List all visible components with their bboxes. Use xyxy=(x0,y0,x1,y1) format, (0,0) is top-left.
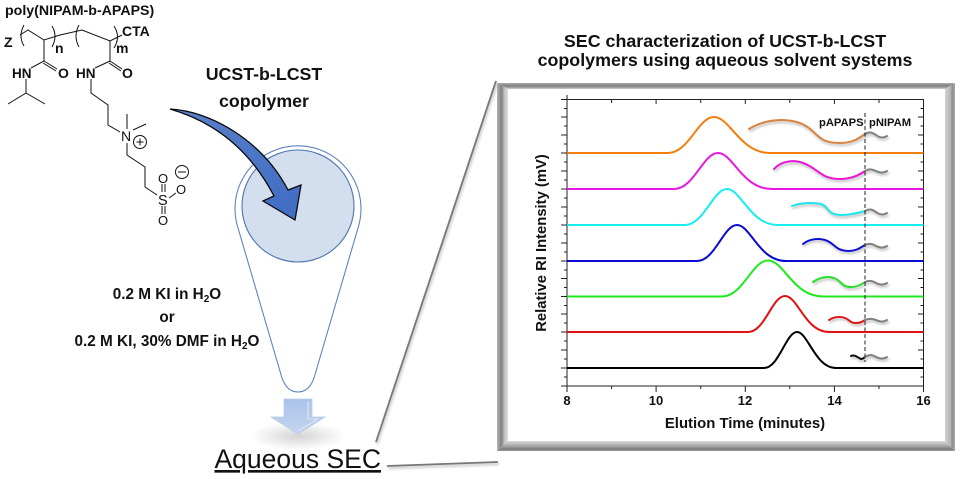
trace: green xyxy=(567,260,924,296)
y axis title: Relative RI Intensity (mV) xyxy=(534,154,550,332)
trace: black xyxy=(567,332,924,368)
text: solvent systems: O xyxy=(248,333,260,350)
chemical structure: poly(NIPAM-b-APAPS): HN xyxy=(12,66,32,81)
chemical structure: poly(NIPAM-b-APAPS): N xyxy=(121,128,131,144)
text: solvent systems: 0.2 M KI, 30% DMF in H xyxy=(75,333,242,350)
heading: chart title: SEC characterization of UCST-b-LCST xyxy=(564,31,886,51)
icon: down arrow to SEC xyxy=(250,399,346,450)
text: solvent systems: O xyxy=(209,286,221,303)
text: solvent systems: or xyxy=(159,309,175,326)
chemical structure: poly(NIPAM-b-APAPS) xyxy=(4,3,188,228)
polymer bonds xyxy=(8,25,188,214)
panel: bevelled chart frame xyxy=(497,83,955,451)
zoom lines from SEC to chart panel xyxy=(376,81,498,466)
funnel: sample drop shape xyxy=(235,146,361,392)
x tick labels: 16 xyxy=(916,393,931,408)
label: UCST-b-LCST copolymer xyxy=(206,64,322,111)
chemical structure: poly(NIPAM-b-APAPS): Z xyxy=(4,34,13,50)
block labels xyxy=(819,117,911,129)
x tick labels: 8 xyxy=(563,393,571,408)
heading: chart title xyxy=(538,31,912,70)
trace: cyan xyxy=(567,189,924,225)
trace: magenta xyxy=(567,153,924,189)
label: UCST-b-LCST copolymer: copolymer xyxy=(219,91,309,111)
chemical structure: poly(NIPAM-b-APAPS): m xyxy=(116,40,128,56)
chart axes and ticks xyxy=(561,95,924,392)
chemical structure: poly(NIPAM-b-APAPS): O xyxy=(58,65,69,81)
text: solvent systems: 2 xyxy=(204,294,210,305)
heading: Aqueous SEC: Aqueous SEC xyxy=(214,444,381,474)
label: UCST-b-LCST copolymer: UCST-b-LCST xyxy=(206,64,322,84)
chart: SEC traces xyxy=(534,95,931,432)
text: solvent systems: 0.2 M KI in H xyxy=(113,286,204,303)
trace: orange xyxy=(567,117,924,153)
dashed divider xyxy=(864,113,866,362)
block labels: pAPAPS xyxy=(819,117,864,129)
chemical structure: poly(NIPAM-b-APAPS): S xyxy=(158,193,168,209)
text: solvent systems xyxy=(75,286,260,352)
block labels: pNIPAM xyxy=(869,117,911,129)
chemical structure: poly(NIPAM-b-APAPS): CTA xyxy=(122,23,150,39)
x tick labels: 14 xyxy=(827,393,842,408)
chemical structure: poly(NIPAM-b-APAPS): HN xyxy=(76,66,96,81)
chemical structure: poly(NIPAM-b-APAPS): O xyxy=(158,171,168,186)
x tick labels xyxy=(563,393,931,408)
heading: chart title: copolymers using aqueous solvent systems xyxy=(538,50,912,70)
chemical structure: poly(NIPAM-b-APAPS): n xyxy=(55,40,64,56)
block copolymer chain glyphs xyxy=(749,120,887,359)
x axis title: Elution Time (minutes) xyxy=(665,416,825,432)
chemical structure: poly(NIPAM-b-APAPS): O xyxy=(176,182,186,197)
trace: red xyxy=(567,296,924,332)
trace: blue xyxy=(567,225,924,261)
x tick labels: 10 xyxy=(649,393,663,408)
chemical structure: poly(NIPAM-b-APAPS): O xyxy=(158,213,168,228)
chemical structure: poly(NIPAM-b-APAPS): O xyxy=(122,65,133,81)
structure title: poly(NIPAM-b-APAPS) xyxy=(5,3,154,19)
icon: curved blue arrow into funnel xyxy=(170,109,301,220)
text: solvent systems: 2 xyxy=(242,341,248,352)
x tick labels: 12 xyxy=(738,393,752,408)
